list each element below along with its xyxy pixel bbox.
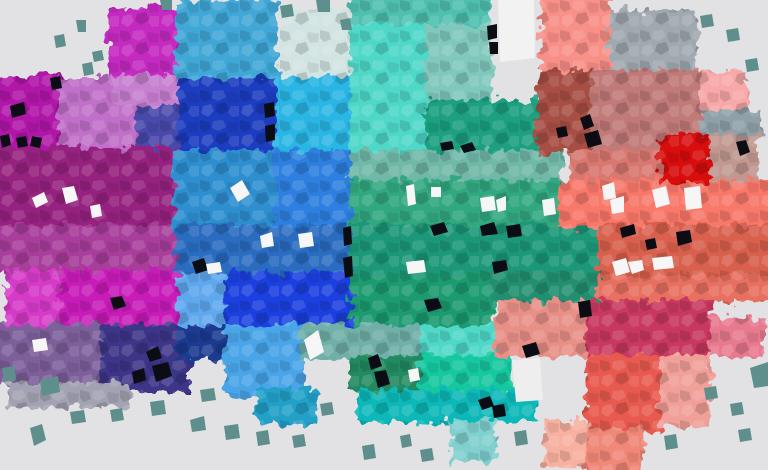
panel: teal column bbox=[300, 0, 620, 462]
panel: blue column bbox=[175, 0, 357, 424]
white shards bbox=[32, 0, 702, 402]
panel: purple column bbox=[0, 8, 190, 408]
panel: red column bbox=[495, 0, 768, 470]
